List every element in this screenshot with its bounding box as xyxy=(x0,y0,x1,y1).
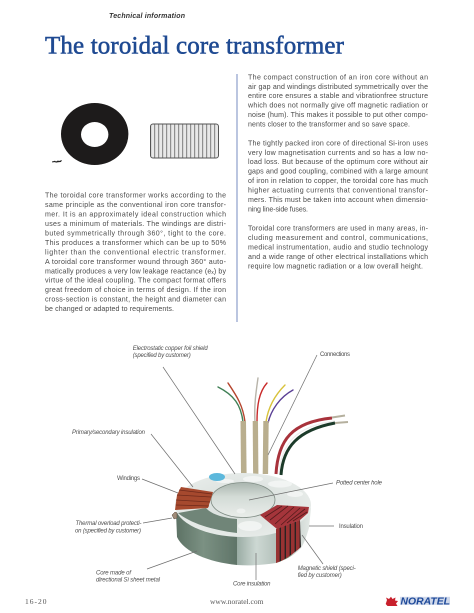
icon: toroid core top view xyxy=(52,103,128,165)
label: electrostatic copper foil shield: Electrostatic copper foil shield xyxy=(133,346,208,352)
label: core insulation: Core insulation xyxy=(233,582,271,588)
label: thermal overload protection: Thermal overload protecti- xyxy=(76,521,142,527)
wires: heavy leads xyxy=(276,416,348,475)
text block: right column paragraph 1: air gap and windings distributed symmetrically over the xyxy=(248,84,428,91)
label: core material xyxy=(96,570,161,584)
text block: left column: buted symmetrically through 360°, tight to the core. xyxy=(45,229,226,237)
label: thermal overload protection xyxy=(75,521,142,534)
label: magnetic shield xyxy=(298,566,356,579)
text block: right column paragraph 2 xyxy=(248,140,429,214)
text block: left column: mer. It is an approximately ideal construction which xyxy=(45,211,226,218)
text block: right column paragraph 3: and a wide range of other electrical installations which xyxy=(248,254,428,261)
text block: right column paragraph 1: which does not normally give off magnetic radiation or xyxy=(247,103,429,110)
wires: sleeves xyxy=(240,421,269,474)
section label: Technical information: Technical information xyxy=(109,13,185,20)
text block: left column: be changed or adapted to requirements. xyxy=(45,306,174,313)
text block: right column paragraph 2: of iron in relation to copper, the toroidal core has much xyxy=(248,178,428,185)
body: left dark wedge on top xyxy=(178,508,237,533)
text block: right column paragraph 2: higher actuating currents that conventional transfor- xyxy=(248,188,429,195)
text block: left column: The toroidal core transformer works according to the xyxy=(45,192,226,200)
label: windings: Windings xyxy=(117,476,140,482)
text block: right column paragraph 2: The tightly packed iron core of directional Si-iron uses xyxy=(248,140,428,147)
text block: right column paragraph 3: cluding measurement and control, communications, xyxy=(248,235,428,242)
text block: right column paragraph 2: very low magnetisation currents and so has a low no- xyxy=(248,150,429,157)
text block: right column paragraph 2: mers. This must be taken into account when dimensio- xyxy=(248,197,429,204)
body: top face xyxy=(175,473,311,537)
text block: left column: virtue of the ideal coupling. The compact format offers xyxy=(45,278,226,285)
text block: left column: A toroidal core transformer wound through 360° auto- xyxy=(45,258,227,266)
label: thermal overload protection: on (specified by customer) xyxy=(75,528,141,534)
label: electrostatic copper foil shield xyxy=(133,346,208,359)
text block: right column paragraph 3 xyxy=(248,226,429,270)
text block: right column paragraph 2: load loss. But because of the optimum core without air xyxy=(248,159,429,166)
text block: right column paragraph 1: entire core ensures a stable and vibrationfree structure xyxy=(248,93,428,100)
column divider xyxy=(236,74,238,322)
title: The toroidal core transformer xyxy=(45,32,345,60)
windings: left red xyxy=(172,487,213,519)
text block: right column paragraph 3: Toroidal core transformers are used in many areas, in- xyxy=(248,226,429,233)
footer: website: www.noratel.com xyxy=(210,597,264,606)
text block: left column: great freedom of choice in terms of design. If the iron xyxy=(45,287,226,294)
body: right side wall xyxy=(276,508,311,563)
label: potted center hole: Potted center hole xyxy=(336,480,383,486)
label: core material: directional Si sheet metal xyxy=(96,578,161,584)
text block: right column paragraph 1: nents closer to the transformer and so save space. xyxy=(248,122,410,129)
label: insulation: Insulation xyxy=(339,524,363,530)
body: top mottling xyxy=(216,476,303,531)
icon: toroid core side view xyxy=(150,124,218,158)
text block: left column xyxy=(45,192,227,313)
label: connections: Connections xyxy=(320,352,350,358)
small hole xyxy=(236,508,246,514)
text block: left column: lighter than the conventional electric transformer. xyxy=(45,249,226,256)
label: primary/secondary insulation: Primary/secondary insulation xyxy=(72,430,146,436)
wires: thin leads xyxy=(218,378,293,423)
text block: left column: matically produces a very low leakage reactance (eₓ) by xyxy=(45,268,226,275)
text block: left column: same principle as the conventional iron core transfor- xyxy=(45,202,227,209)
leader lines xyxy=(142,355,334,580)
label: magnetic shield: fied by customer) xyxy=(298,573,342,579)
windings: right red top xyxy=(260,505,309,529)
label: core material: Core made of xyxy=(96,570,132,576)
text block: right column paragraph 1: noise (hum). This makes it possible to put other compo- xyxy=(248,112,429,119)
footer: page number: 16-20 xyxy=(25,597,47,606)
text block: right column paragraph 3: require low magnetic radiation or a low overall height. xyxy=(248,264,423,270)
logo: Noratel: NORATEL xyxy=(400,596,450,607)
windings: right red side xyxy=(276,520,301,563)
centre hole xyxy=(211,482,275,518)
text block: right column paragraph 2: ning line-side fuses. xyxy=(248,206,308,214)
label: magnetic shield: Magnetic shield (speci- xyxy=(298,566,356,572)
diagram: toroidal transformer photo xyxy=(172,378,348,565)
text block: left column: uses a minimum of materials. The windings are distri- xyxy=(45,221,227,228)
text block: right column paragraph 3: medical instrumentation, audio and studio technology xyxy=(248,245,428,252)
text block: left column: This produces a transformer which can be up to 50% xyxy=(45,240,227,247)
blue dot xyxy=(209,473,225,481)
text block: right column paragraph 2: gaps and good coupling, combined with a large amount xyxy=(248,169,428,176)
text block: right column paragraph 1: The compact construction of an iron core without an xyxy=(248,74,428,81)
text block: right column paragraph 1 xyxy=(247,74,429,129)
body: left core side xyxy=(176,512,237,565)
body: front light core side xyxy=(237,529,276,565)
text block: left column: cross-section is constant, the height and diameter can xyxy=(45,297,226,304)
label: electrostatic copper foil shield: (specified by customer) xyxy=(133,353,191,359)
